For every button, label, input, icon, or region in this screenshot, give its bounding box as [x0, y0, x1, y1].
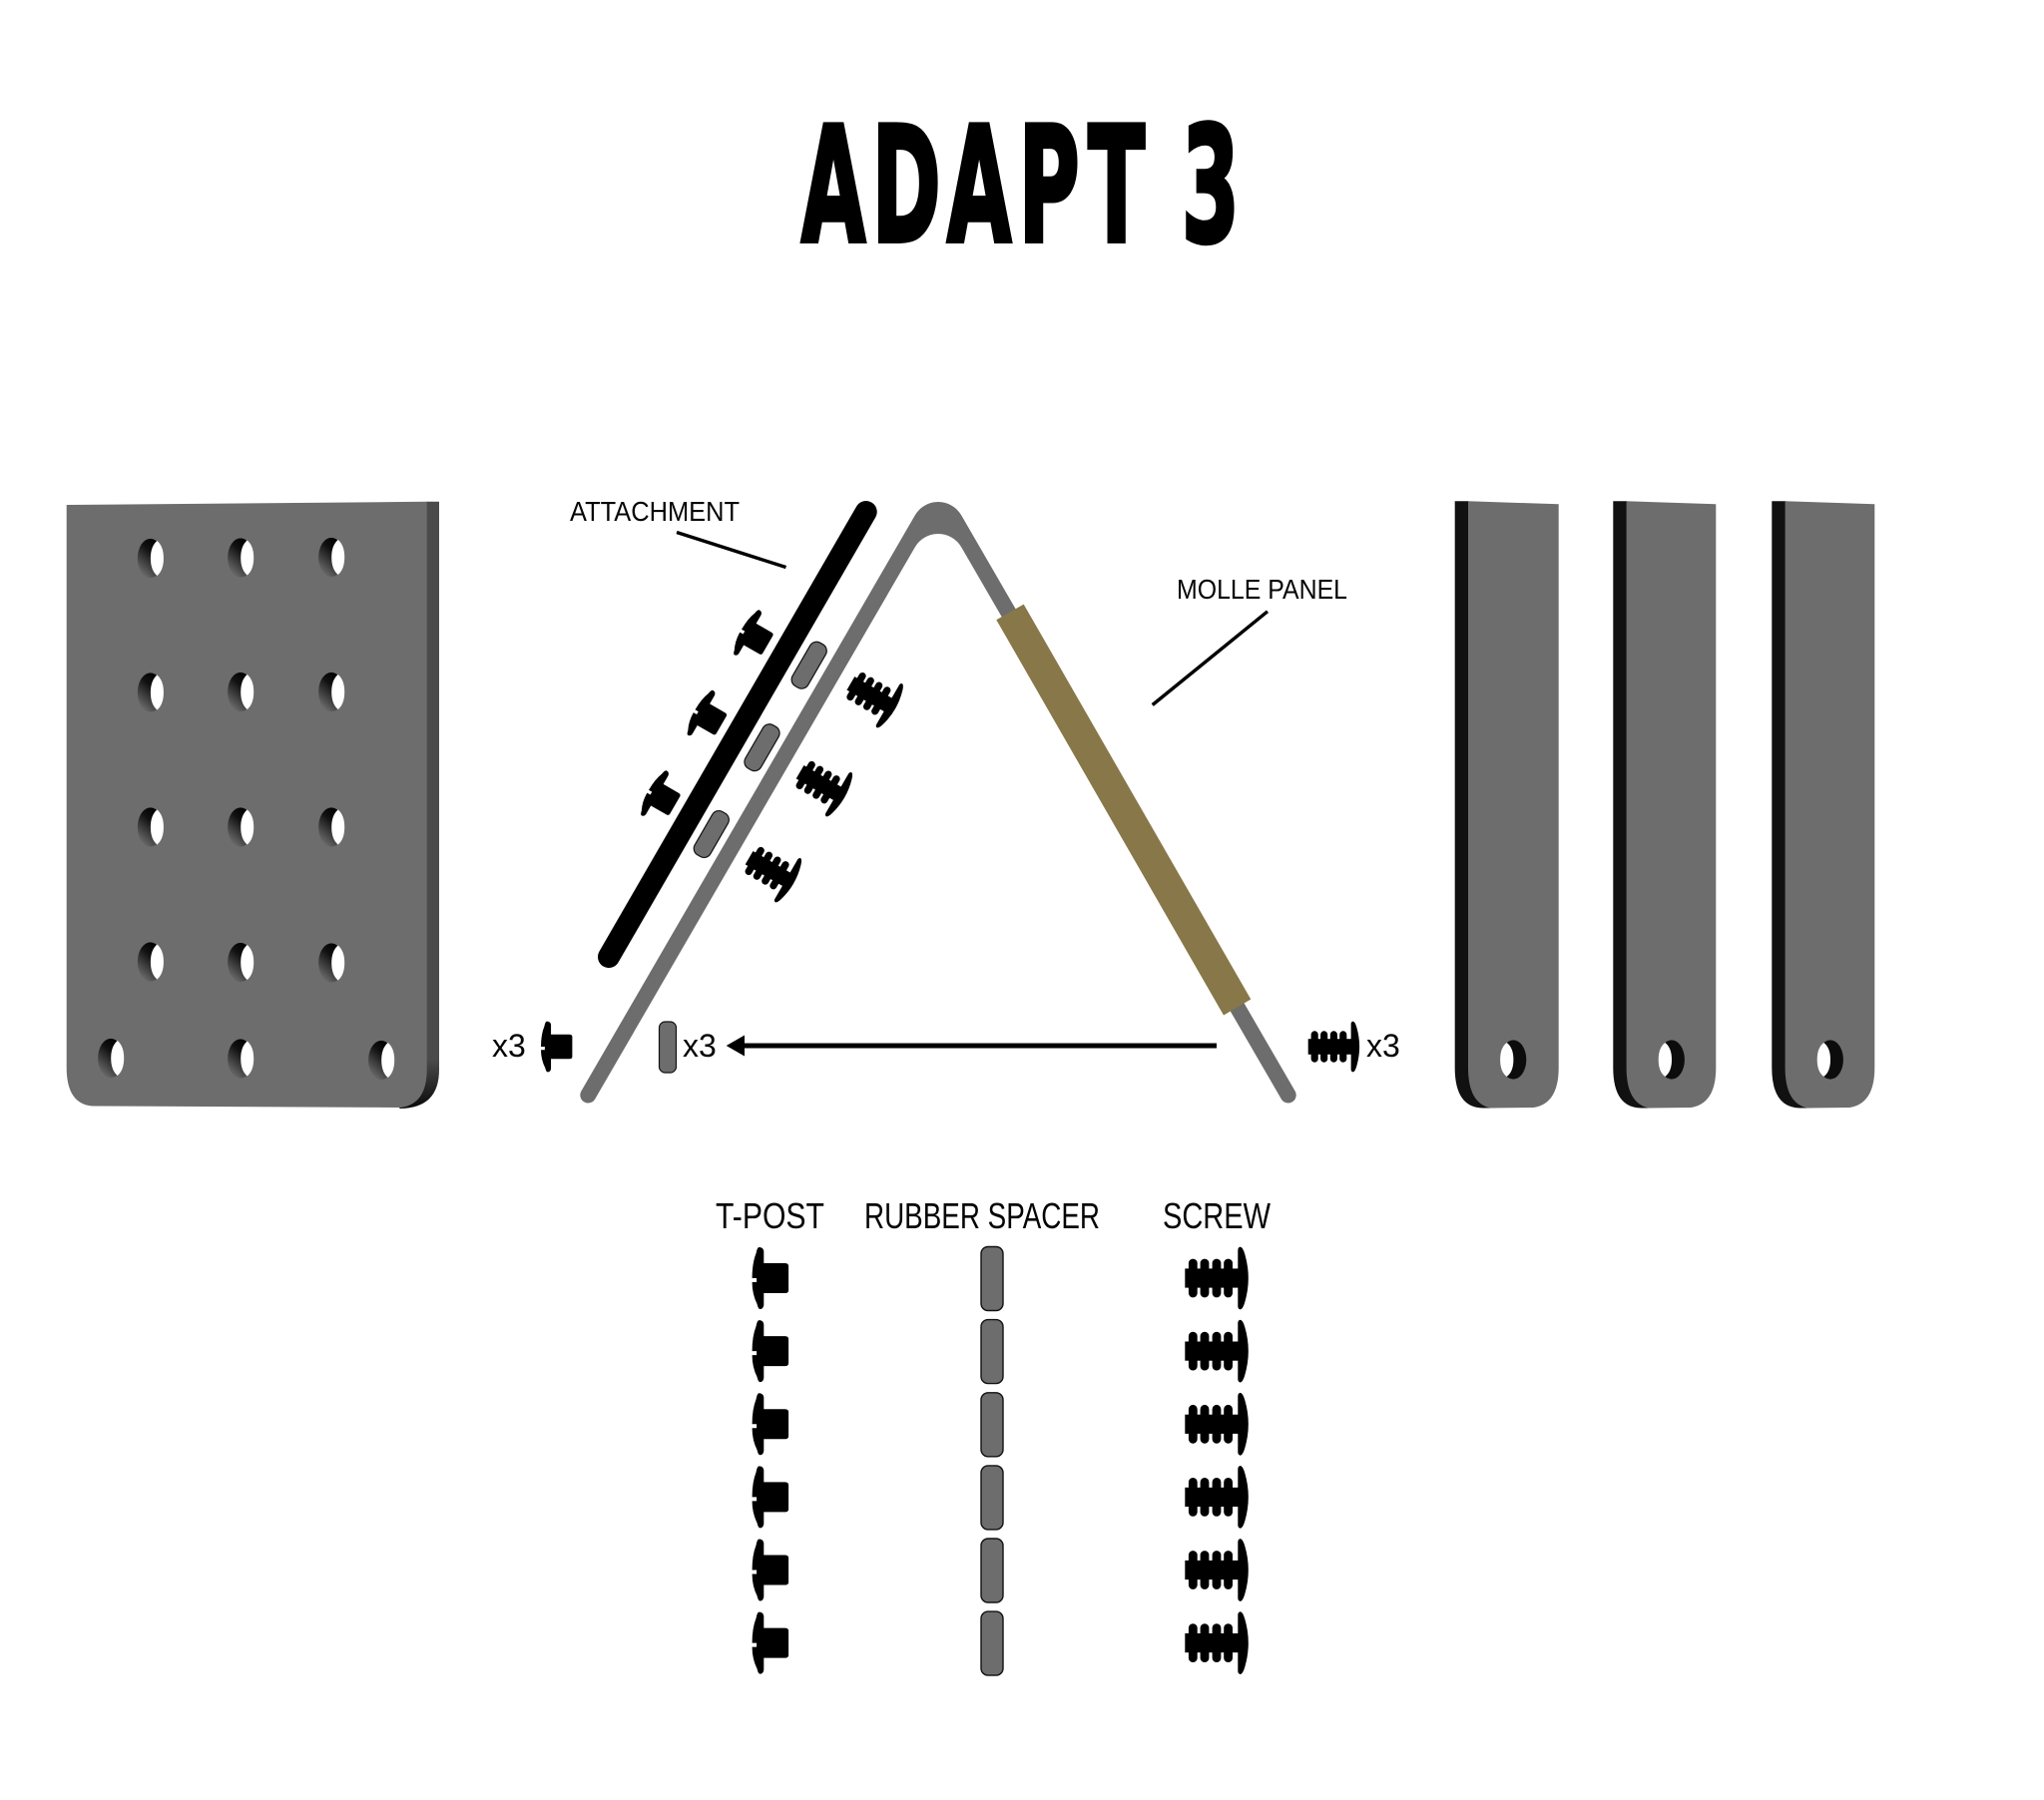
icon: small screw — [1308, 1022, 1359, 1072]
strap 1 — [1455, 501, 1559, 1108]
diagonal screws — [737, 662, 908, 905]
parts list: t-post — [716, 1195, 824, 1674]
label x3: x3 — [1366, 1028, 1400, 1064]
label x3: x3 — [683, 1028, 717, 1064]
strap 2 — [1613, 501, 1716, 1108]
leader line: attachment — [677, 533, 786, 567]
title: ADAPT 3 — [801, 95, 1240, 279]
leader line: molle panel — [1153, 612, 1268, 704]
label x3: x3 — [492, 1028, 526, 1064]
panel: back plate with holes — [67, 502, 439, 1109]
screw column — [1185, 1247, 1249, 1674]
plate side edge — [399, 502, 439, 1109]
plate holes — [98, 538, 394, 1080]
diagonal rubber spacers — [692, 640, 829, 860]
quantity: spacer x3 — [659, 1022, 717, 1073]
label: attachment: ATTACHMENT — [570, 496, 740, 527]
panel: three strap plates — [1455, 501, 1874, 1108]
icon: small t-post — [541, 1022, 572, 1072]
quantity: t-post x3 — [492, 1022, 572, 1072]
parts list: rubber spacer — [864, 1195, 1100, 1675]
bent grey bracket — [580, 502, 1296, 1103]
spacer column — [981, 1247, 1003, 1675]
icon: small spacer — [659, 1022, 677, 1073]
heading: SCREW — [1163, 1195, 1271, 1236]
heading: T-POST — [716, 1195, 824, 1236]
arrow — [727, 1036, 1217, 1056]
parts list: screw — [1163, 1195, 1271, 1674]
diagonal t-posts — [636, 608, 780, 827]
t-post column — [753, 1247, 788, 1674]
strap 3 — [1772, 501, 1874, 1108]
attachment bar — [609, 512, 866, 957]
plate front face — [67, 502, 427, 1108]
quantity: screw x3 — [1308, 1022, 1400, 1072]
label: molle panel: MOLLE PANEL — [1177, 574, 1347, 605]
heading: RUBBER SPACER — [864, 1195, 1100, 1236]
molle panel band — [996, 605, 1251, 1016]
